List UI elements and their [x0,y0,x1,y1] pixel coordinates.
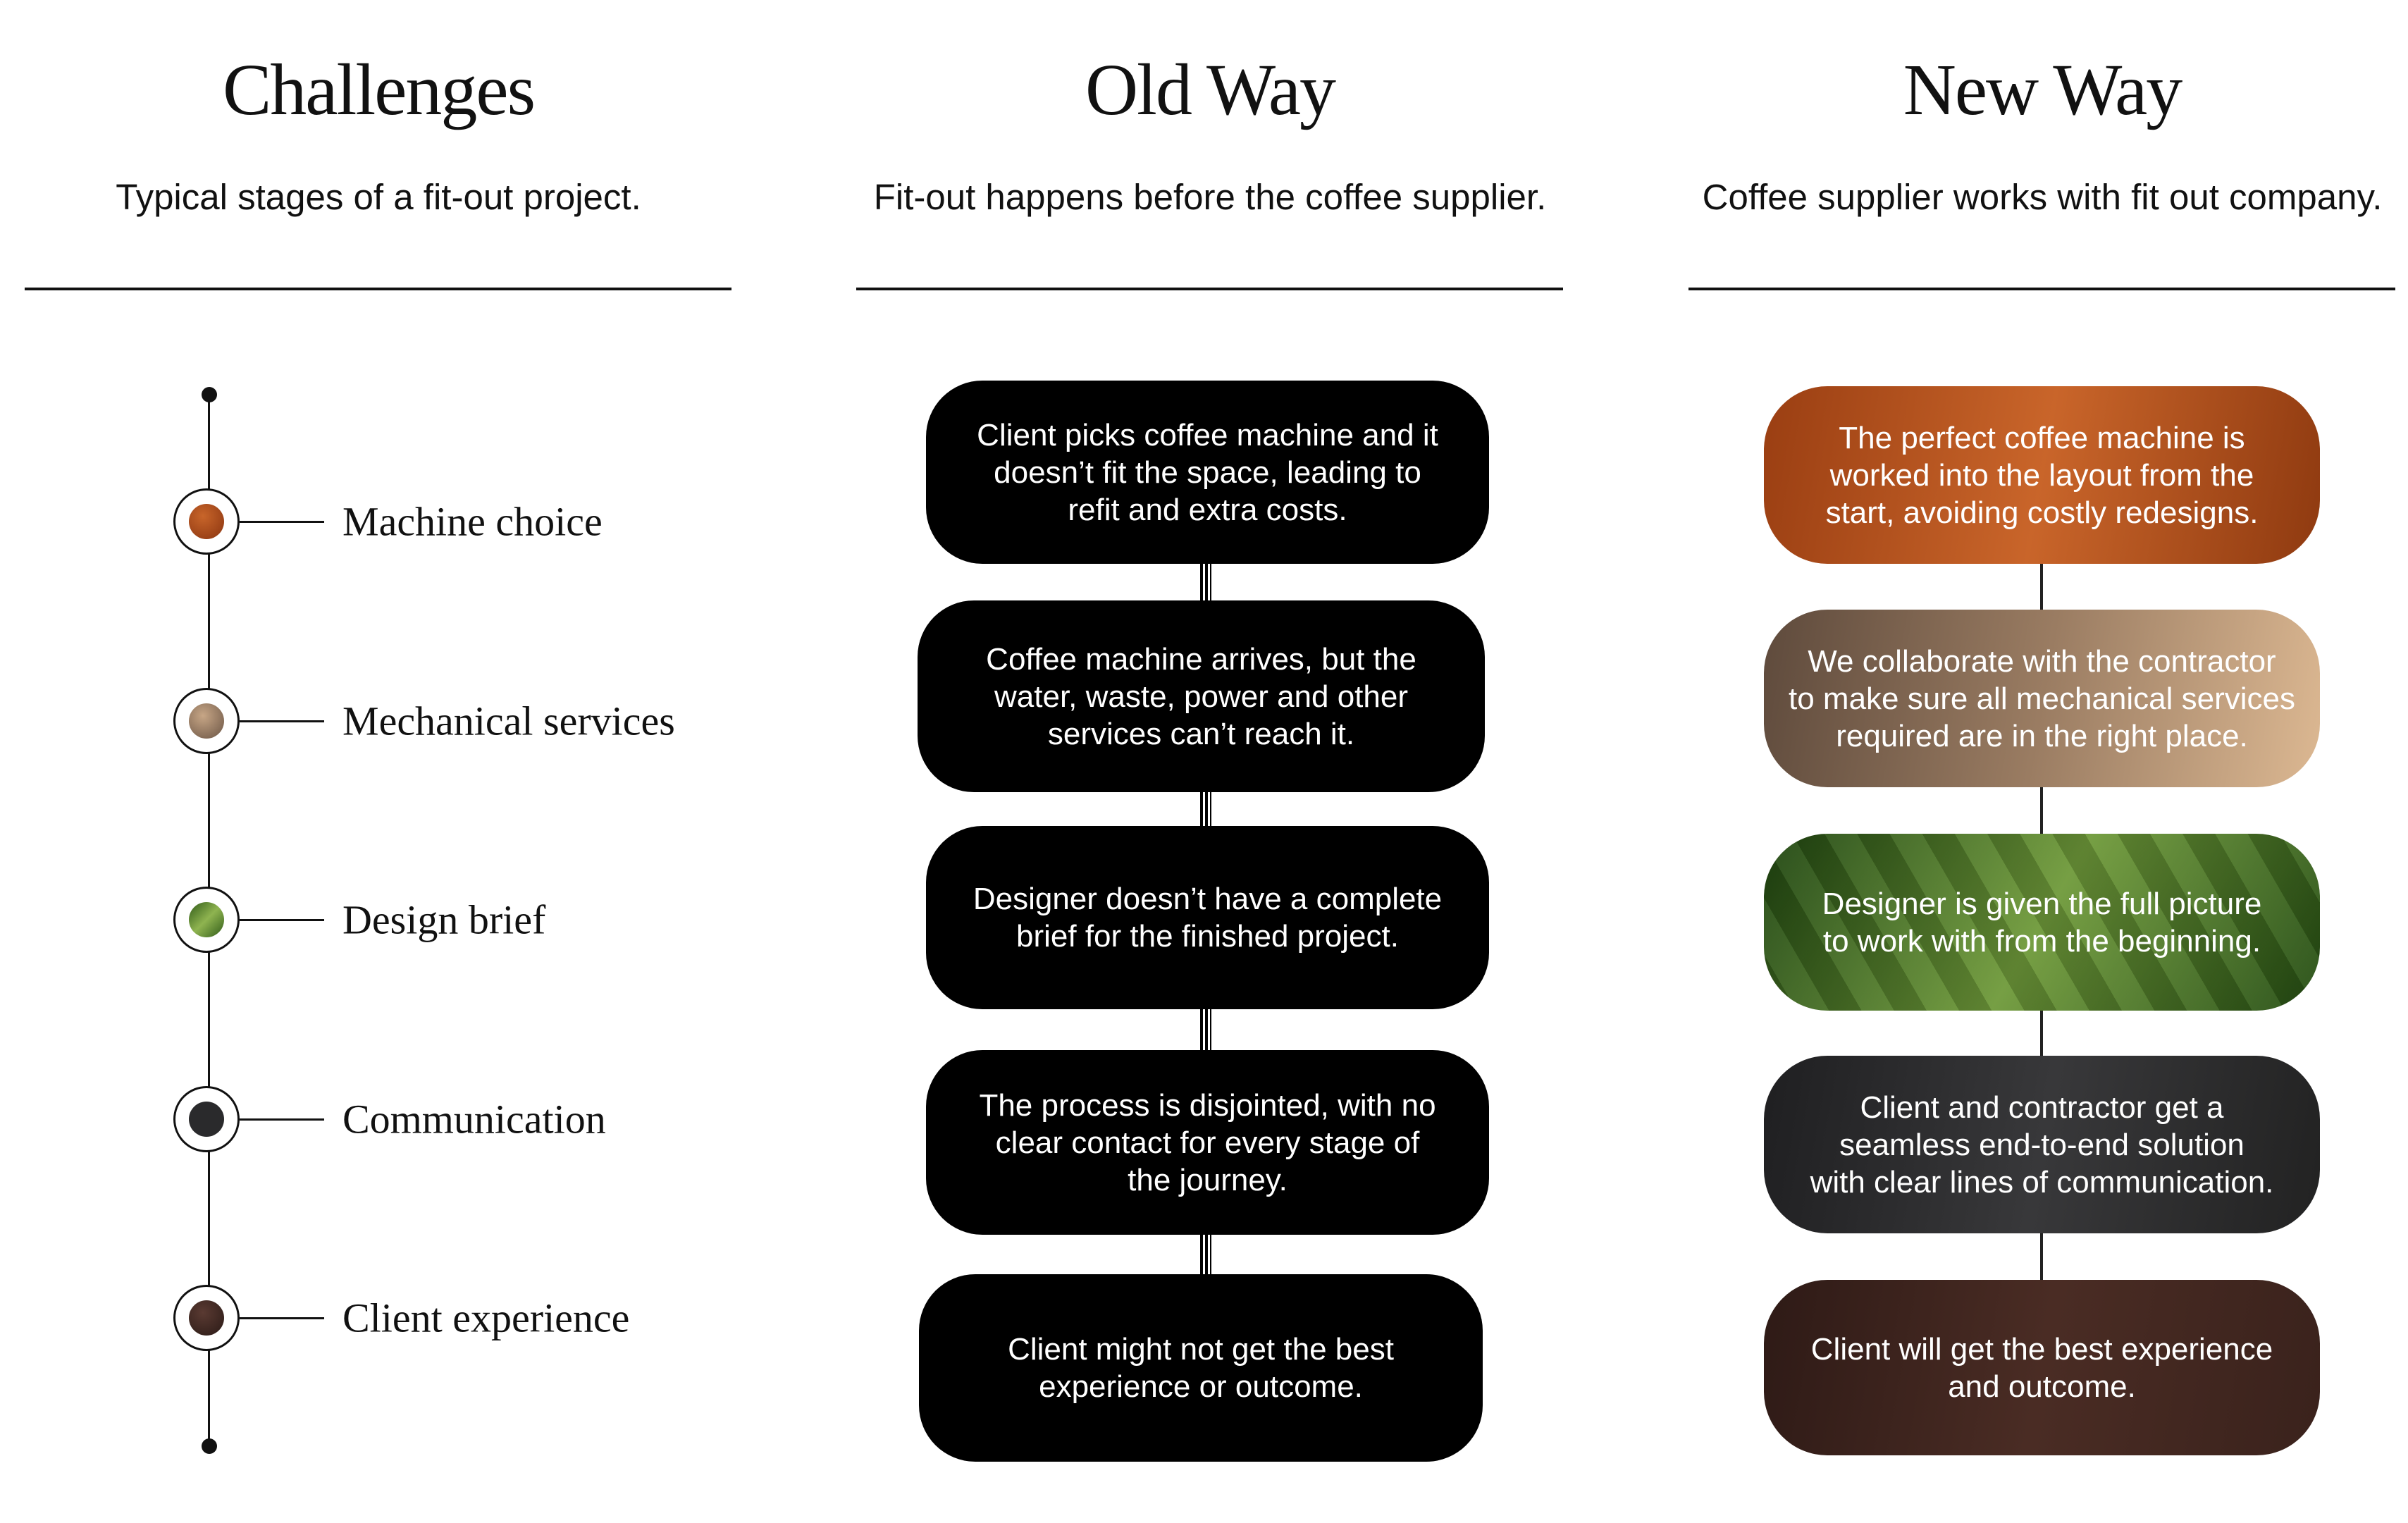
stage: Design brief [173,887,545,953]
title: New Way: New Way [1903,49,2181,130]
old box 3: Designer doesn’t have a complete brief for the finished project. [973,882,1442,954]
new box 2: required are in the right place. [1836,719,2248,753]
old box 2: Coffee machine arrives, but the water, waste, power and other services can’t reach it. [986,641,1416,751]
subtitle: challenges: Typical stages of a fit-out project. [116,177,641,217]
title: Old Way: Old Way [1085,49,1335,130]
old box 1: doesn’t fit the space, leading to [994,455,1421,489]
new box 2: We collaborate with the contractor [1808,644,2276,678]
old box 5 [919,1274,1483,1462]
stage: Mechanical services [173,688,675,754]
old box 1: Client picks coffee machine and it [977,417,1438,452]
new box 2 [1764,610,2320,787]
old box 2 [918,600,1485,792]
old box 4: The process is disjointed, with no [979,1088,1436,1122]
title: Challenges: Challenges [223,49,534,130]
new box 1 [1764,386,2320,564]
stage: Communication [173,1086,606,1152]
new box 4: Client and contractor get a [1860,1090,2224,1125]
new box 4: with clear lines of communication. [1810,1164,2273,1200]
subtitle: new way: Coffee supplier works with fit out company. [1703,177,2382,217]
stage: Design brief: Design brief [342,896,545,943]
new box 3: Designer is given the full picture [1822,887,2261,920]
new box 1: The perfect coffee machine is [1839,420,2245,455]
old box 3 [926,826,1489,1009]
old box 5: Client might not get the best experience or outcome. [1008,1332,1394,1404]
old box 1: refit and extra costs. [1068,492,1347,527]
new box 3 [1764,834,2320,1011]
new box 5: and outcome. [1948,1369,2136,1404]
new box 5 [1764,1280,2320,1455]
stage: Mechanical services: Mechanical services [342,698,675,744]
new box 1: start, avoiding costly redesigns. [1826,495,2258,530]
old box 4 [926,1050,1489,1235]
old box 4: the journey. [1128,1163,1288,1197]
new box 2: to make sure all mechanical services [1789,681,2295,716]
old box 4: clear contact for every stage of [996,1125,1419,1160]
stage: Machine choice: Machine choice [342,499,603,544]
old way connector [1200,557,1211,1290]
new way connector [2040,564,2043,1283]
new box 4: seamless end-to-end solution [1839,1128,2245,1161]
subtitle: old way: Fit-out happens before the coffee supplier. [874,177,1546,217]
stage: Client experience [173,1285,629,1351]
timeline [202,387,217,1454]
new box 5: Client will get the best experience [1811,1332,2273,1366]
new box 3: to work with from the beginning. [1823,923,2261,958]
new box 4 [1764,1056,2320,1233]
stage: Communication: Communication [342,1097,606,1142]
old box 1 [926,381,1489,564]
new box 1: worked into the layout from the [1830,458,2254,492]
stage: Machine choice [173,488,603,555]
stage: Client experience: Client experience [342,1295,629,1340]
